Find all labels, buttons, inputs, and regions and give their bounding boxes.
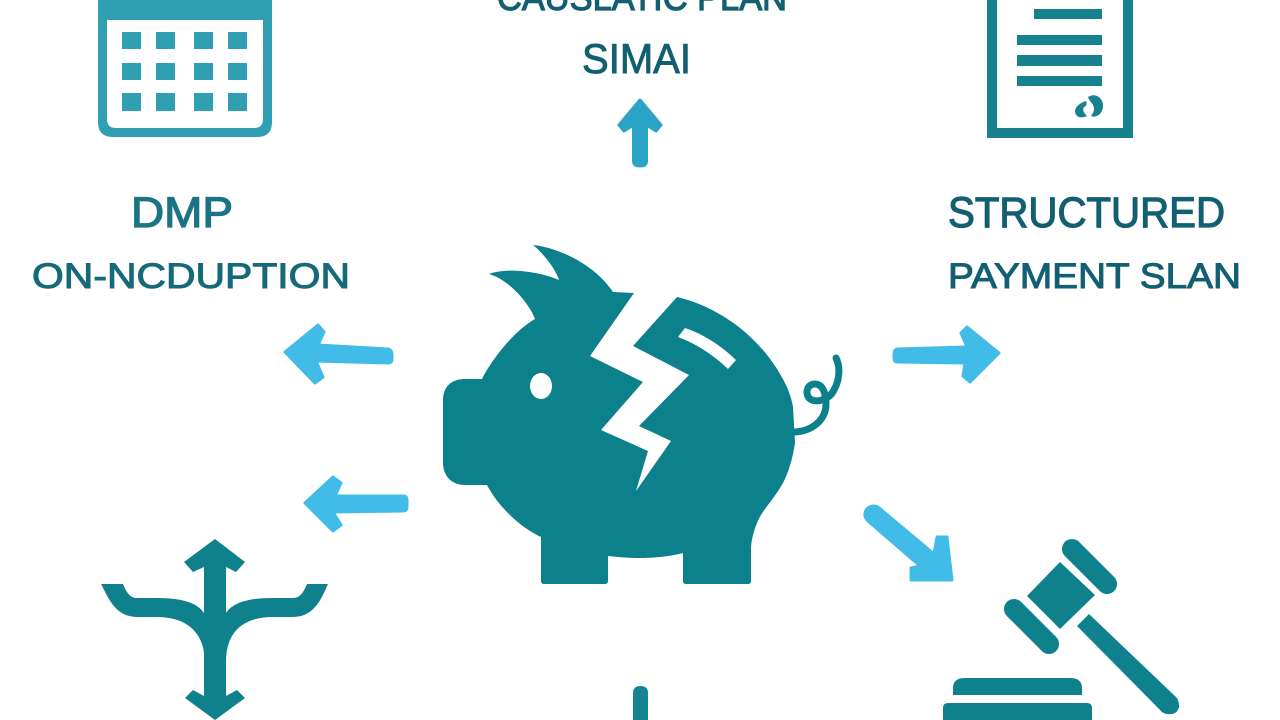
arrow: up to top plan — [619, 100, 661, 166]
arrow: left upper — [285, 325, 392, 383]
gavel head — [1027, 562, 1095, 629]
icon: document — [987, 0, 1133, 138]
arrow stub: bottom center — [633, 686, 648, 720]
arrow: right upper — [894, 327, 999, 382]
heading: DMP option: DMP — [131, 189, 233, 237]
heading: top plan label: SIMAI — [582, 35, 691, 82]
heading: DMP option — [32, 189, 350, 296]
pig tail — [795, 358, 839, 432]
heading: structured payment plan: PAYMENT SLAN — [948, 257, 1241, 296]
icon: forking arrows — [101, 539, 328, 720]
heading: DMP option: ON-NCDUPTION — [32, 257, 350, 296]
heading: structured payment plan — [948, 189, 1241, 296]
pig eye — [530, 373, 552, 399]
icon: gavel — [943, 549, 1179, 720]
sound block — [953, 678, 1082, 695]
gavel caps — [1014, 549, 1107, 644]
arrow: diagonal to gavel — [865, 506, 952, 580]
arrow: left lower — [305, 477, 407, 531]
coin slot — [678, 328, 736, 369]
piggy bank with crack — [443, 245, 839, 584]
icon: calendar — [98, 0, 272, 137]
heading: structured payment plan: STRUCTURED — [948, 189, 1225, 237]
icon: document seal — [1075, 95, 1103, 117]
gavel handle — [1077, 614, 1179, 714]
heading: top plan label — [497, 0, 787, 82]
